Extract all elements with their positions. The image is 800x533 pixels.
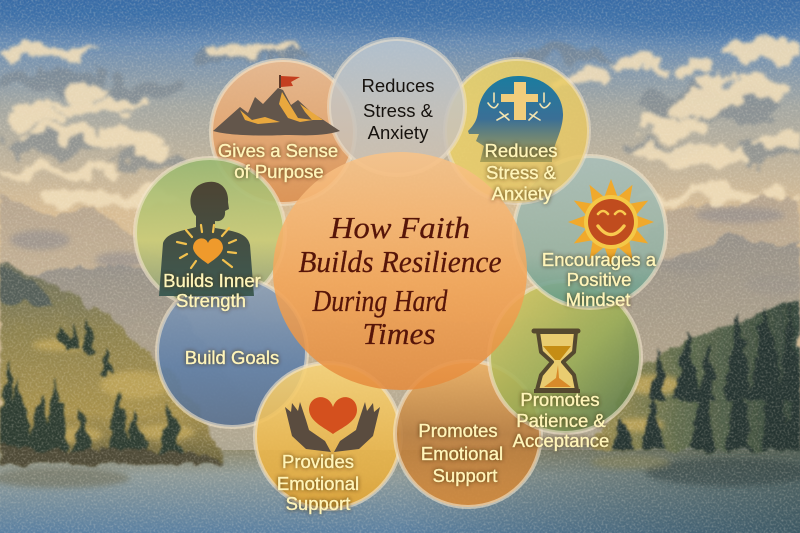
label: Patience & xyxy=(516,410,606,431)
lake reflections xyxy=(0,455,800,488)
title: Builds Resilience xyxy=(298,244,502,279)
blue sky patches xyxy=(0,0,800,36)
circle: provides emotional support xyxy=(255,363,401,509)
hill left xyxy=(0,262,225,462)
label: Gives a Sense xyxy=(218,140,338,161)
circle: encourages a positive mindset xyxy=(514,156,666,308)
label: Acceptance xyxy=(513,430,609,451)
tree line right xyxy=(610,300,800,450)
content: promotes patience and acceptance xyxy=(513,331,609,451)
label: Reduces xyxy=(484,140,558,161)
mountain shadows xyxy=(10,207,800,295)
icon: head with cross xyxy=(468,76,563,162)
lake darker right side xyxy=(400,445,800,533)
label: build goals: Build Goals xyxy=(185,347,279,368)
label: Builds Inner xyxy=(163,270,261,291)
content: gives a sense of purpose xyxy=(213,75,340,182)
content: provides emotional support xyxy=(277,397,380,514)
label: promotes emotional support: Promotes xyxy=(418,420,498,441)
hill right xyxy=(590,300,800,450)
label: Promotes xyxy=(520,389,600,410)
label: promotes emotional support: Emotional xyxy=(421,443,503,464)
golden patches xyxy=(32,339,683,443)
circle: promotes patience and acceptance xyxy=(489,281,641,433)
label: promotes emotional support: Support xyxy=(433,465,497,486)
label: Provides xyxy=(282,451,354,472)
label: reduces stress and anxiety, top: Stress & xyxy=(363,100,434,121)
title: Times xyxy=(362,316,436,351)
label: of Purpose xyxy=(234,161,324,182)
label: Positive xyxy=(567,269,631,290)
label: Stress & xyxy=(486,162,557,183)
content: reduces stress and anxiety, head xyxy=(468,76,563,204)
far mountains xyxy=(0,195,800,470)
near ridge right xyxy=(620,233,800,420)
circle: promotes emotional support xyxy=(395,361,541,507)
label: Emotional xyxy=(277,473,359,494)
near ridge left xyxy=(0,265,260,420)
lake xyxy=(0,450,800,533)
circle: reduces stress and anxiety, head xyxy=(445,59,589,203)
slate cloud shadows xyxy=(0,47,800,169)
icon: person with glowing heart xyxy=(159,182,254,296)
icon: smiling sun xyxy=(568,179,654,265)
label: reduces stress and anxiety, top: Reduces xyxy=(361,75,435,96)
circle: builds inner strength xyxy=(135,158,285,308)
label: reduces stress and anxiety, top: Anxiety xyxy=(368,122,429,143)
circle: build goals xyxy=(157,277,307,427)
content: encourages a positive mindset xyxy=(542,179,657,310)
icon: hands holding heart xyxy=(285,397,380,452)
content: builds inner strength xyxy=(159,182,261,311)
label: Anxiety xyxy=(492,183,553,204)
label: Encourages a xyxy=(542,249,657,270)
label: Mindset xyxy=(566,289,630,310)
label: Strength xyxy=(176,290,246,311)
clouds xyxy=(0,38,800,207)
circle: gives a sense of purpose xyxy=(211,60,355,204)
circle: reduces stress and anxiety, top xyxy=(329,39,465,175)
label: Support xyxy=(286,493,350,514)
icon: hourglass xyxy=(534,331,580,391)
title: During Hard xyxy=(312,283,448,318)
title: How Faith xyxy=(329,210,470,245)
circle: central title xyxy=(273,152,527,390)
icon: mountain with flag xyxy=(213,75,340,136)
tree line left xyxy=(0,268,225,464)
